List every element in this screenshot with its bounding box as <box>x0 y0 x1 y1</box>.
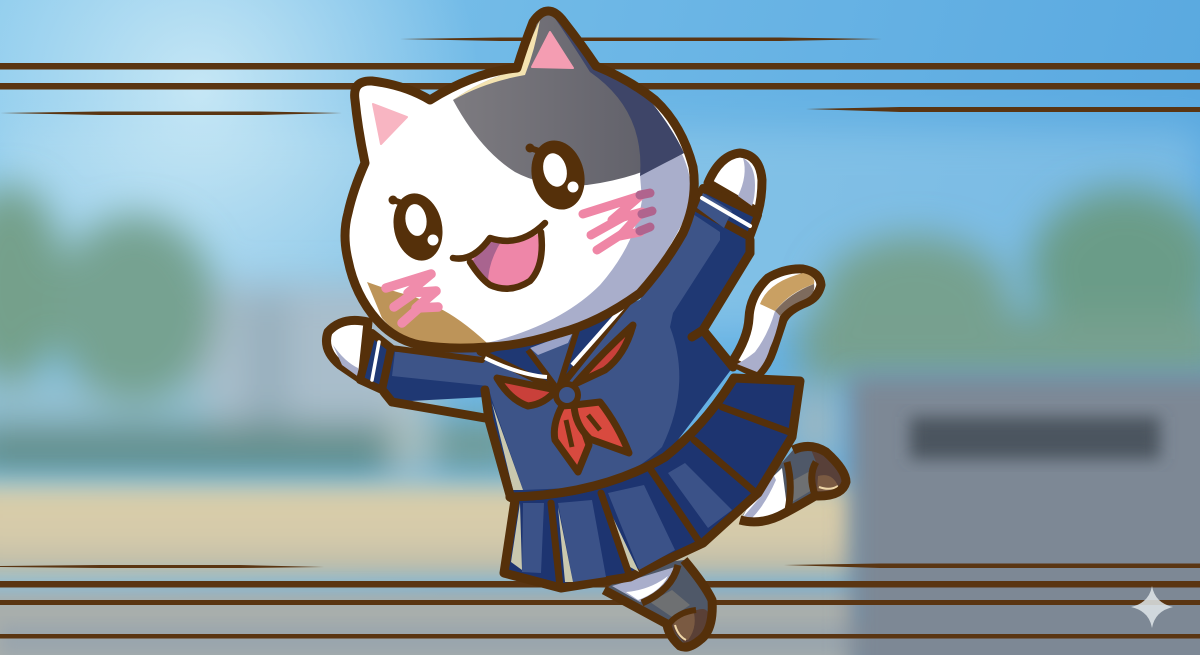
open mouth <box>453 223 545 289</box>
cat tail <box>732 269 821 375</box>
lower foot <box>604 560 712 647</box>
pleated skirt <box>504 378 800 588</box>
cream ear highlight <box>453 20 540 100</box>
torso fill <box>384 207 750 497</box>
body outline <box>384 253 750 495</box>
right blush <box>583 193 652 250</box>
right eye <box>524 135 592 215</box>
left eye <box>387 189 449 265</box>
sparkle watermark <box>1131 586 1173 628</box>
ear pink inner right <box>532 32 573 68</box>
tan head patch <box>367 282 487 345</box>
red neck scarf <box>497 325 633 472</box>
extended cuff <box>360 333 391 390</box>
head outline <box>345 11 694 348</box>
cat head <box>345 11 694 348</box>
lighter fabric <box>392 212 720 490</box>
right cheek shadow <box>487 154 691 343</box>
gray head patch <box>453 14 684 185</box>
sailor collar <box>480 300 630 390</box>
extended hand <box>326 320 368 380</box>
uniform body and arms <box>326 153 762 497</box>
ear pink inner left <box>373 104 407 144</box>
left blush <box>386 274 438 323</box>
back foot <box>740 446 846 522</box>
raised cuff <box>695 188 758 237</box>
raised hand <box>708 153 762 212</box>
cream body sliver <box>492 403 523 490</box>
dark side of patch <box>552 14 684 176</box>
